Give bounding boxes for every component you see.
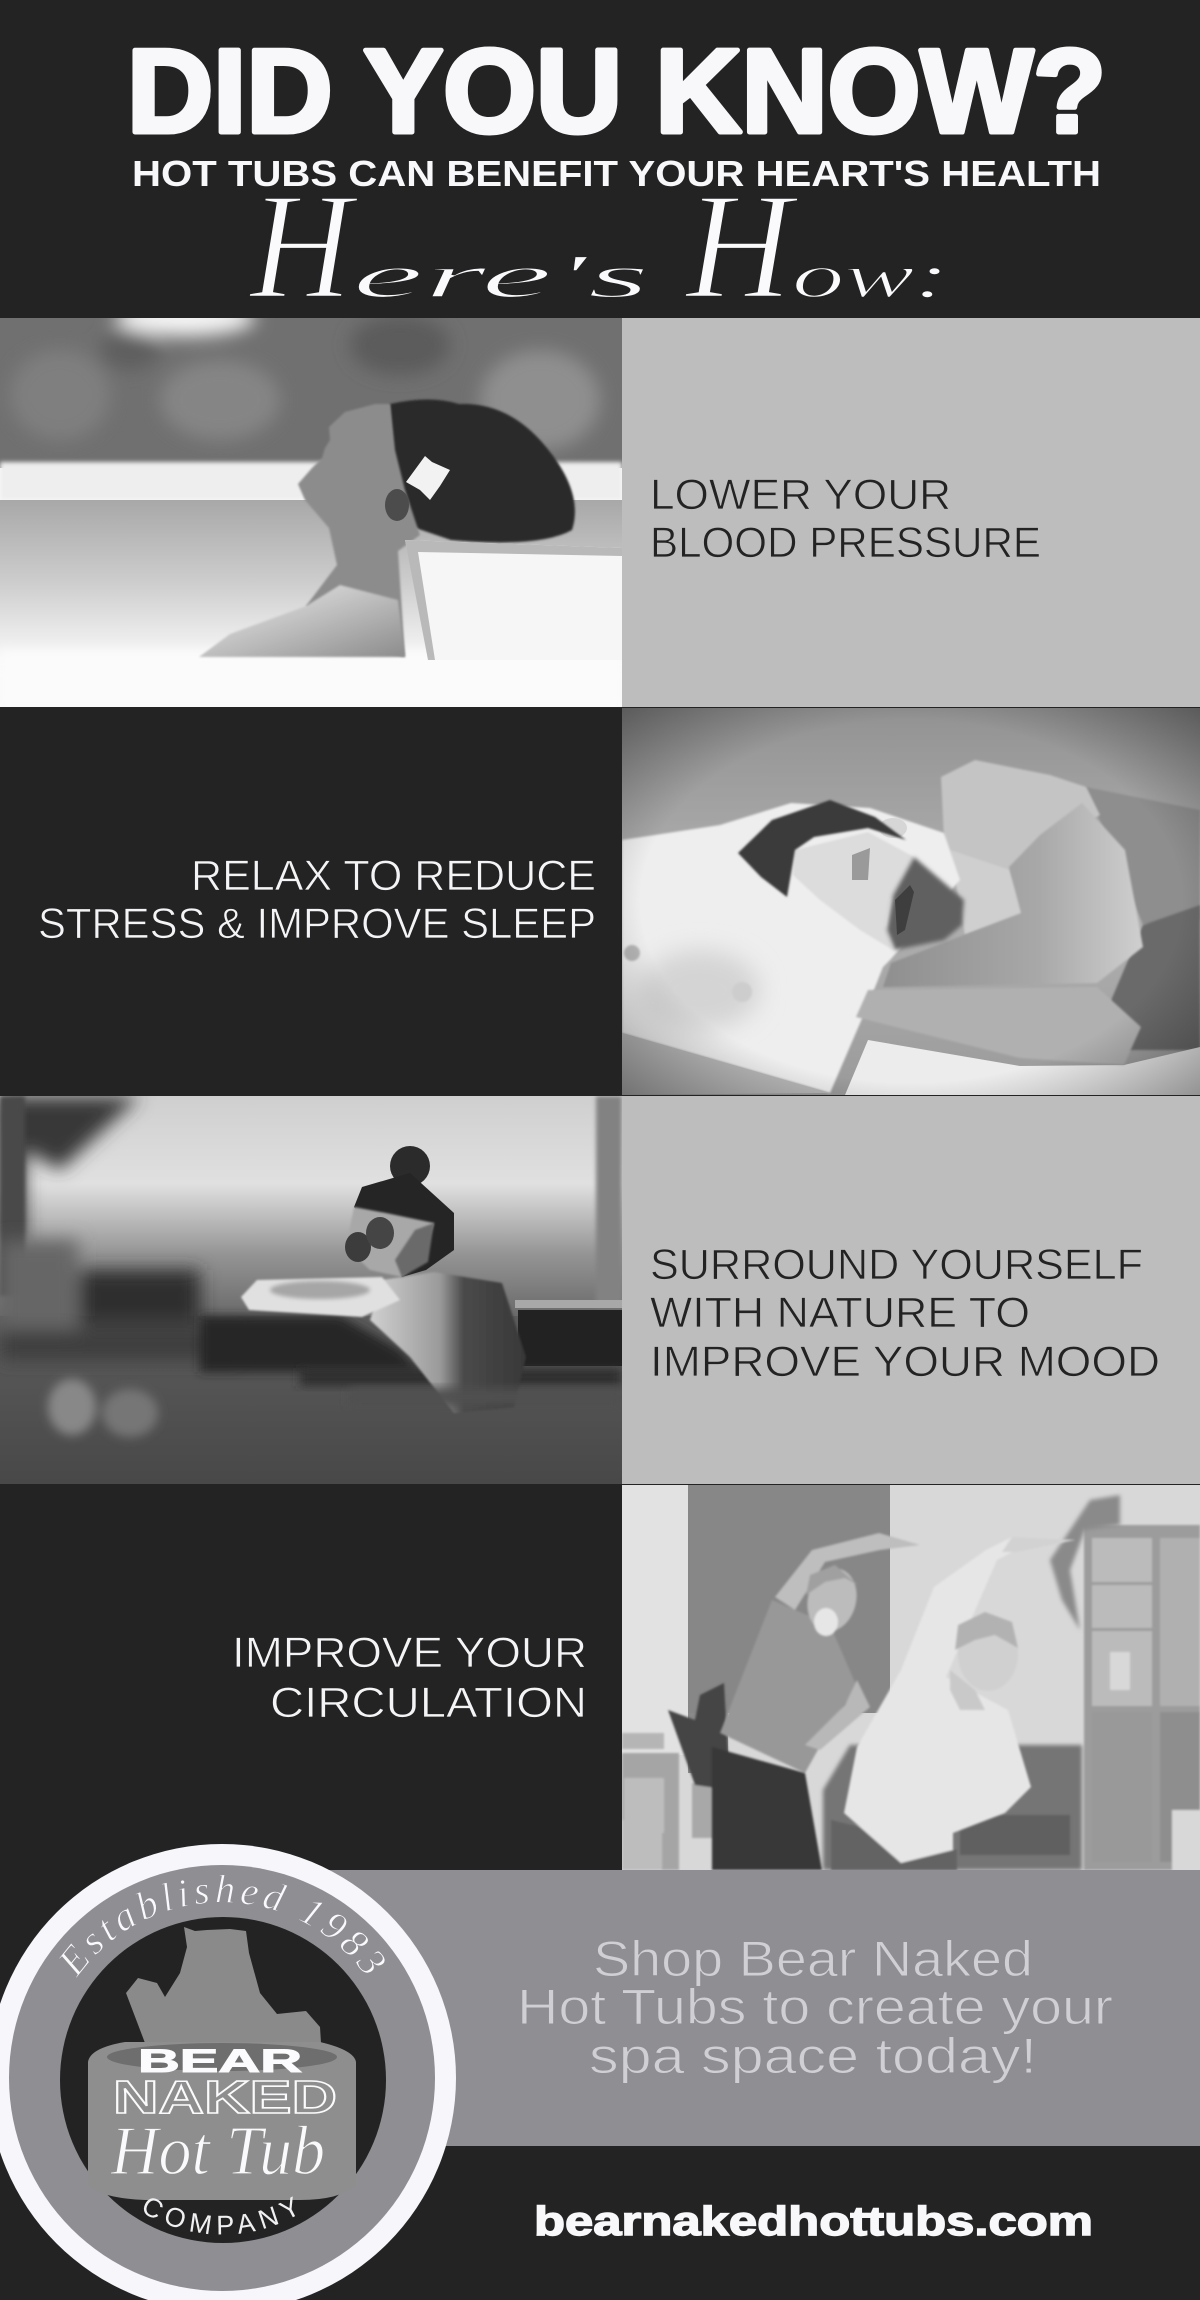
panel: photo of man sleeping <box>622 708 1200 1095</box>
woman <box>199 400 575 657</box>
panel text: IMPROVE YOUR MOOD <box>650 1338 1160 1386</box>
subtitle: HOT TUBS CAN BENEFIT YOUR HEART'S HEALTH <box>132 153 1101 194</box>
collar <box>952 852 1021 934</box>
icon: flower <box>406 456 450 500</box>
pillow <box>622 803 960 1093</box>
torso and blanket <box>1086 787 1200 925</box>
skin <box>298 404 420 657</box>
call to action text: Hot Tubs to create your <box>517 1979 1113 2035</box>
panel: improve circulation text: IMPROVE YOUR <box>232 1629 587 1677</box>
bookcase <box>1084 1525 1200 1870</box>
woman <box>241 1146 526 1413</box>
script heading <box>248 162 949 330</box>
script heading: H <box>684 162 799 330</box>
beard <box>887 857 964 950</box>
arm <box>241 1277 400 1317</box>
icon: bear silhouette <box>126 1927 321 2043</box>
sheet <box>845 1040 1200 1095</box>
website url: bearnakedhottubs.com <box>534 2198 1093 2244</box>
logo wordmark: NAKED <box>113 2071 337 2123</box>
panel: photo of woman in hot tub <box>0 1096 622 1484</box>
logo wordmark: Hot Tub <box>110 2113 325 2190</box>
title: DID YOU KNOW? <box>127 25 1106 158</box>
panel: relax and sleep text <box>38 852 596 948</box>
panel text <box>650 471 1041 567</box>
panel: photo of woman relaxing in pool <box>0 300 622 707</box>
panel: improve circulation text: CIRCULATION <box>270 1679 587 1727</box>
pool edge <box>405 540 622 642</box>
call to action text: spa space today! <box>589 2028 1037 2084</box>
panel: relax and sleep text: STRESS & IMPROVE SLEEP <box>38 900 596 948</box>
sunglasses <box>345 1232 371 1262</box>
logo wordmark <box>110 2043 337 2190</box>
hair <box>738 800 906 897</box>
panel text: WITH NATURE TO <box>650 1289 1030 1337</box>
call to action text <box>517 1931 1113 2084</box>
call to action text: Shop Bear Naked <box>593 1931 1033 1987</box>
script heading: ow: <box>792 243 949 311</box>
panel: lower blood pressure <box>622 318 1200 707</box>
panel text: SURROUND YOURSELF <box>650 1241 1143 1289</box>
panel text: BLOOD PRESSURE <box>650 519 1041 567</box>
badge arc text: company: COMPANY <box>144 2196 295 2234</box>
panel: relax and sleep text: RELAX TO REDUCE <box>191 852 596 900</box>
face <box>793 832 914 950</box>
logo wordmark: BEAR <box>138 2043 302 2079</box>
face <box>346 1207 434 1277</box>
back <box>370 1272 526 1413</box>
header <box>127 25 1106 330</box>
badge arc text: established: Established 1983 <box>60 1875 385 1978</box>
sofa <box>823 1745 1082 1870</box>
panel: shop call to action <box>320 1870 1200 2146</box>
hair <box>390 400 575 542</box>
panel: surround yourself with nature <box>622 1096 1200 1484</box>
bun <box>390 1146 430 1186</box>
woman <box>831 1537 1075 1870</box>
closed eye and mouth <box>852 848 870 880</box>
panel: photo of couple stretching <box>622 1485 1200 1870</box>
hair <box>354 1173 454 1277</box>
script heading: H <box>248 162 359 330</box>
script heading: ere's <box>352 243 650 311</box>
left shelf and plant <box>622 1683 730 1870</box>
logo badge <box>0 1844 456 2300</box>
man's arms <box>883 803 1143 987</box>
badge arc text: company <box>144 2196 295 2234</box>
panel text: LOWER YOUR <box>650 471 951 519</box>
panel text <box>650 1241 1160 1386</box>
icon: hot tub <box>88 2042 356 2200</box>
panel: improve circulation text <box>232 1629 587 1727</box>
t-shirt <box>940 760 1100 870</box>
man <box>712 1533 920 1870</box>
ear <box>879 818 907 838</box>
